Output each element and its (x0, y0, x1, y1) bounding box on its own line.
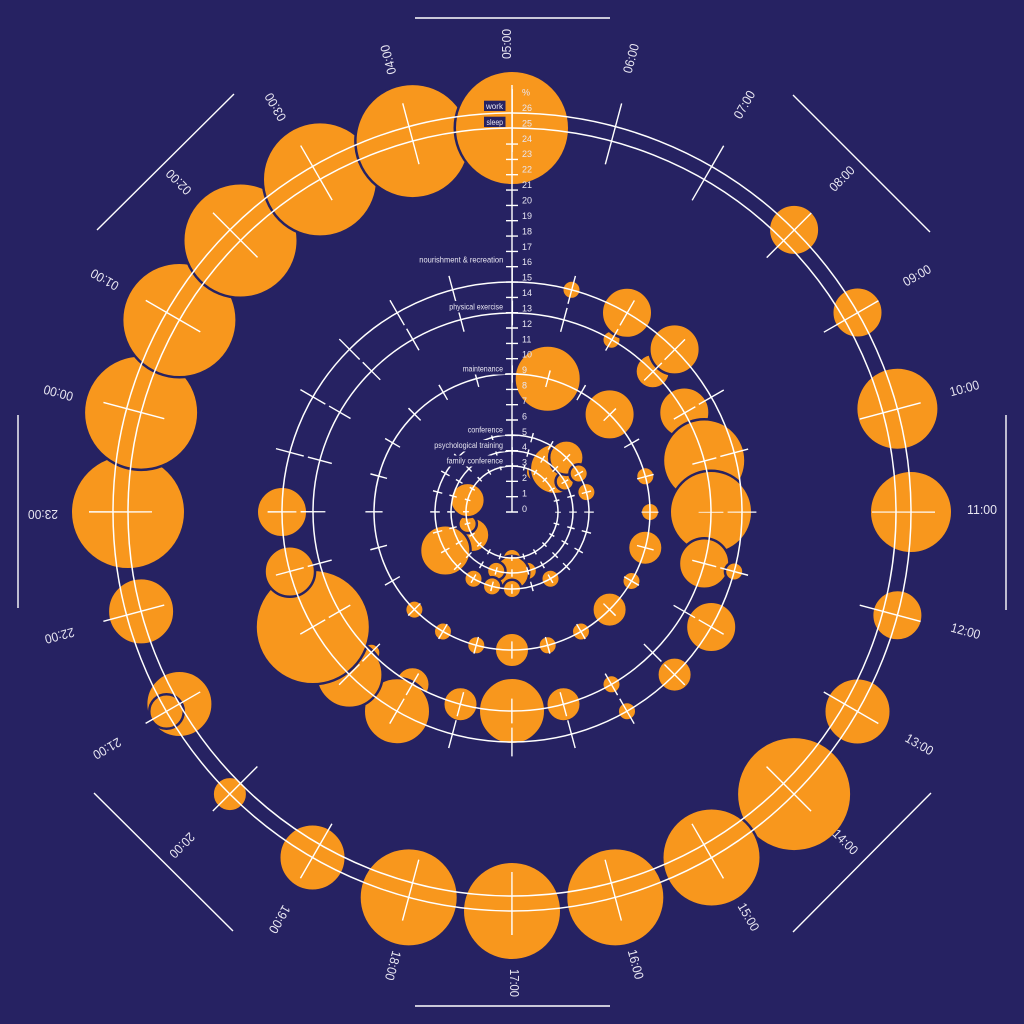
activity labels: maintenance (463, 363, 503, 373)
hour labels around the clock: 17:00 (507, 969, 522, 997)
percentage axis numbers: 13 (522, 303, 532, 313)
bubbles: psychological training ring (487, 444, 580, 590)
percentage axis numbers: 22 (522, 165, 532, 175)
percentage axis numbers: 11 (522, 334, 531, 344)
percentage axis numbers: 1 (522, 488, 527, 498)
activity labels: family conference (447, 455, 503, 465)
percentage axis numbers: % (522, 88, 530, 98)
activity labels: physical exercise (449, 301, 503, 311)
bubbles: family conference ring (450, 463, 544, 567)
bubbles: conference ring (420, 440, 596, 598)
percentage axis numbers: 26 (522, 103, 532, 113)
bubbles: work ring (149, 205, 952, 960)
activity labels: psychological training (434, 440, 503, 450)
hour labels around the clock: 05:00 (499, 29, 514, 59)
bubbles: maintenance ring (405, 345, 663, 667)
hour labels around the clock: 18:00 (382, 949, 404, 982)
percentage axis numbers: 21 (522, 180, 532, 190)
percentage axis numbers: 9 (522, 365, 527, 375)
hour labels around the clock: 10:00 (948, 377, 981, 399)
hour labels around the clock: 16:00 (625, 948, 647, 981)
hour labels around the clock: 06:00 (620, 42, 642, 75)
percentage axis numbers: 10 (522, 350, 532, 360)
bubbles: nourishment and recreation ring (256, 281, 743, 744)
percentage axis numbers: 20 (522, 196, 532, 206)
hour labels around the clock: 02:00 (163, 166, 195, 198)
concentric activity rings (113, 113, 911, 911)
percentage axis numbers: 23 (522, 149, 532, 159)
hour labels around the clock: 13:00 (903, 730, 936, 758)
hour labels around the clock: 12:00 (949, 620, 982, 642)
percentage axis line and ticks (506, 85, 518, 512)
percentage axis numbers: 0 (522, 504, 527, 514)
hour labels around the clock: 22:00 (43, 625, 76, 647)
percentage axis numbers: 5 (522, 427, 527, 437)
hour labels around the clock: 00:00 (42, 382, 75, 404)
percentage axis numbers: 12 (522, 319, 532, 329)
activity labels: conference (468, 425, 503, 435)
hour labels around the clock: 01:00 (88, 266, 121, 294)
hour labels around the clock: 04:00 (377, 43, 399, 76)
percentage axis numbers: 14 (522, 288, 532, 298)
percentage axis numbers: 7 (522, 396, 527, 406)
hour labels around the clock: 03:00 (261, 90, 289, 124)
percentage axis numbers: 19 (522, 211, 532, 221)
percentage axis numbers: 8 (522, 380, 527, 390)
percentage axis numbers: 17 (522, 242, 532, 252)
percentage axis numbers: 24 (522, 134, 532, 144)
hour labels around the clock: 09:00 (900, 261, 934, 289)
percentage axis numbers: 2 (522, 473, 527, 483)
activity labels: sleep (486, 117, 503, 127)
hour labels around the clock: 21:00 (90, 735, 124, 763)
percentage axis numbers: 15 (522, 273, 532, 283)
hour labels around the clock: 19:00 (266, 903, 294, 936)
hour labels around the clock: 11:00 (967, 502, 997, 517)
percentage axis numbers: 4 (522, 442, 527, 452)
hour labels around the clock: 08:00 (826, 163, 858, 195)
bubbles: sleep ring (71, 71, 569, 737)
hour labels around the clock: 23:00 (28, 507, 58, 522)
hour labels around the clock: 20:00 (166, 829, 198, 861)
bubbles: physical exercise ring (362, 330, 752, 744)
percentage axis numbers: 3 (522, 458, 527, 468)
hour labels around the clock: 07:00 (730, 88, 758, 121)
percentage axis numbers: 6 (522, 411, 527, 421)
percentage axis numbers (522, 88, 532, 514)
activity labels: nourishment & recreation (419, 255, 503, 265)
percentage axis numbers: 18 (522, 226, 532, 236)
hour labels around the clock: 15:00 (735, 900, 763, 934)
activity labels: work (485, 101, 504, 111)
hour tick marks on rings (120, 120, 904, 904)
percentage axis numbers: 25 (522, 118, 532, 128)
percentage axis numbers: 16 (522, 257, 532, 267)
activity labels (417, 101, 506, 466)
hour labels around the clock: 14:00 (829, 826, 861, 858)
